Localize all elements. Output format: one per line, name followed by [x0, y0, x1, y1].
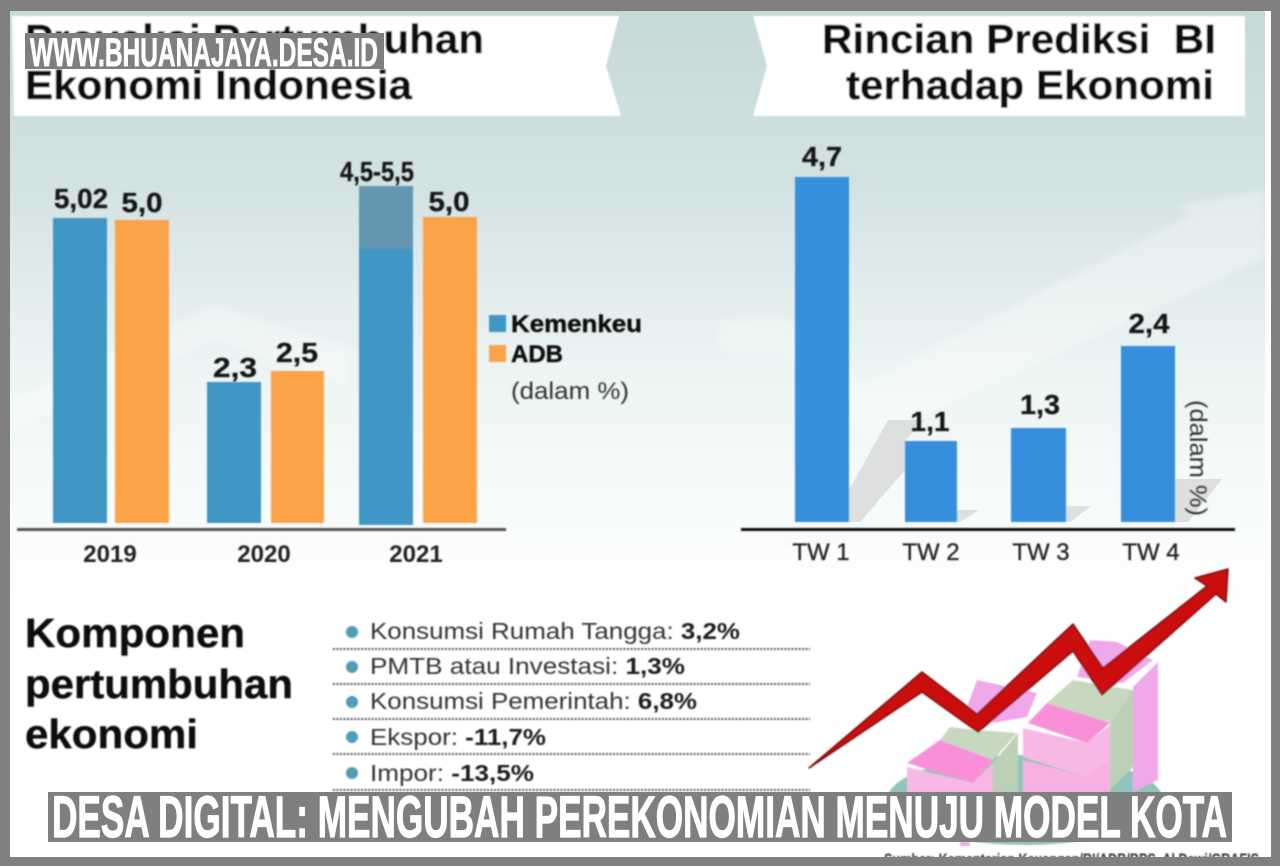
heading: komponen: pertumbuhan: [25, 661, 293, 707]
bar chart: BI quarterly prediction: TW 1: [792, 539, 850, 566]
bar chart: BI quarterly prediction: 1,1: [910, 406, 950, 437]
bar chart: BI quarterly prediction: TW 4: [1122, 539, 1180, 566]
component list: Konsumsi Rumah Tangga: 3,2%: [370, 618, 740, 644]
watermark: site address: [25, 31, 384, 75]
bar chart: BI quarterly prediction: 4,7: [802, 141, 842, 172]
component list: Konsumsi Pemerintah: 6,8%: [370, 688, 697, 714]
heading: komponen: Komponen: [25, 610, 245, 656]
background faint arrow: [1038, 192, 1264, 300]
bar chart: BI quarterly prediction: 1,3: [1020, 389, 1060, 420]
right title banner: Rincian Prediksi BI: [822, 16, 1216, 62]
watermark: site address: WWW.BHUANAJAYA.DESA.ID: [30, 31, 378, 75]
chart shadows: [849, 420, 1222, 522]
axis: [17, 528, 506, 531]
2021 bars: 4,5-5,5: [340, 156, 414, 187]
heading: komponen: ekonomi: [25, 711, 198, 757]
2020 bars: [207, 337, 324, 568]
background gradient: [10, 11, 1265, 502]
2020 bars: 2020: [237, 541, 291, 568]
left stack: [940, 727, 1017, 760]
2021 bars: 2021: [389, 541, 443, 568]
left title banner: Proyeksi Pertumbuhan: [25, 16, 484, 62]
illustration: rising red arrow: [809, 569, 1228, 768]
2020 bars: 2,5: [276, 337, 318, 368]
legend: (dalam %): [511, 378, 629, 405]
bar chart: BI quarterly prediction: TW 2: [902, 539, 960, 566]
bar chart: growth projection: [17, 156, 506, 568]
2019 bars: 5,02: [54, 183, 108, 214]
unit label: (dalam %): [1184, 400, 1211, 516]
2019 bars: [53, 183, 169, 568]
heading: komponen: [25, 610, 293, 757]
illustration: money stacks: [887, 640, 1163, 846]
bar chart: BI quarterly prediction: TW 3: [1012, 539, 1070, 566]
2021 bars: [340, 156, 477, 568]
right title banner: terhadap Ekonomi: [846, 62, 1214, 108]
legend: ADB: [511, 341, 563, 368]
2021 bars: 5,0: [428, 186, 470, 217]
2019 bars: 2019: [83, 541, 137, 568]
component list: Impor: -13,5%: [370, 760, 534, 786]
left title banner: [12, 16, 621, 116]
left title banner: Ekonomi Indonesia: [25, 62, 413, 108]
legend: [489, 311, 642, 405]
component list: PMTB atau Investasi: 1,3%: [370, 653, 685, 679]
component list: [333, 618, 810, 790]
back piles: [967, 680, 1037, 723]
right stack: [1047, 680, 1133, 723]
right title banner: [753, 16, 1245, 116]
legend: Kemenkeu: [511, 311, 642, 338]
pink sliver below banner: [960, 842, 970, 846]
2019 bars: 5,0: [122, 187, 162, 218]
bar chart: BI quarterly prediction: [741, 141, 1235, 566]
bar chart: BI quarterly prediction: 2,4: [1128, 308, 1170, 339]
2020 bars: 2,3: [213, 352, 257, 383]
component list: Ekspor: -11,7%: [370, 724, 546, 750]
